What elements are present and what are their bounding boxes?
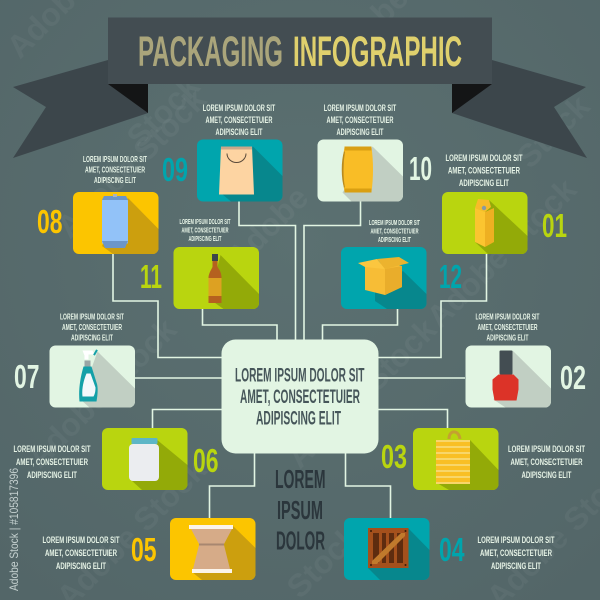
icon: jar <box>129 438 159 481</box>
caption 11 <box>180 219 231 243</box>
icon: nail polish <box>492 350 518 400</box>
caption 01: LOREM IPSUM DOLOR SIT <box>446 153 523 164</box>
caption 04 <box>478 535 555 572</box>
icon: bottle <box>208 254 222 303</box>
watermark: Adobe Stock <box>279 311 443 475</box>
card 08: can <box>73 192 158 254</box>
icon: paper bag <box>436 432 470 484</box>
caption 12 <box>369 220 420 244</box>
caption 05: LOREM IPSUM DOLOR SIT <box>42 535 120 546</box>
caption 06: ADIPISCING ELIT <box>27 470 77 481</box>
caption 10: LOREM IPSUM DOLOR SIT <box>324 103 396 114</box>
card 07: spray bottle <box>50 346 135 408</box>
caption 10 <box>324 103 396 138</box>
caption 02: ADIPISCING ELIT <box>486 332 529 342</box>
caption 04: ADIPISCING ELIT <box>491 561 541 572</box>
card 11: bottle <box>174 247 259 309</box>
watermark: Adobe Stock <box>19 311 183 475</box>
number 08: 08 <box>37 203 62 240</box>
number 11: 11 <box>140 258 162 295</box>
lorem ipsum dolor text <box>275 464 326 556</box>
number 02: 02 <box>560 359 586 396</box>
watermark: Adobe <box>219 179 315 275</box>
icon: pouch <box>342 146 373 192</box>
caption 09 <box>203 103 275 138</box>
caption 06: AMET, CONSECTETUIER <box>16 457 88 468</box>
ribbon band <box>108 18 492 84</box>
connector lines <box>113 201 486 518</box>
title: INFOGRAPHIC <box>293 28 462 76</box>
icon: spray bottle <box>79 349 98 402</box>
caption 01: AMET, CONSECTETUIER <box>448 166 520 176</box>
number 09: 09 <box>162 151 188 188</box>
watermark: Adobe Stock <box>49 81 213 245</box>
card 05: pizza box <box>170 518 256 580</box>
caption 08: LOREM IPSUM DOLOR SIT <box>83 154 147 164</box>
caption 09: AMET, CONSECTETUIER <box>206 115 273 126</box>
central panel <box>222 340 378 454</box>
icon: box <box>358 257 409 295</box>
caption 08: AMET, CONSECTETUIER <box>85 164 145 174</box>
caption 06: LOREM IPSUM DOLOR SIT <box>14 444 91 455</box>
number 10: 10 <box>409 150 432 187</box>
number 06: 06 <box>193 442 218 479</box>
number 12: 12 <box>439 258 462 295</box>
ribbon right tail <box>452 60 587 158</box>
central panel text: ADIPISCING ELIT <box>256 408 341 430</box>
caption 02: LOREM IPSUM DOLOR SIT <box>476 312 540 322</box>
number 04: 04 <box>439 531 465 568</box>
lorem ipsum dolor text: LOREM <box>275 464 326 494</box>
caption 02: AMET, CONSECTETUIER <box>478 322 538 332</box>
caption 01 <box>446 153 523 189</box>
caption 12: LOREM IPSUM DOLOR SIT <box>369 220 420 227</box>
icon: pizza box <box>189 525 233 573</box>
number 05: 05 <box>131 531 156 568</box>
caption 05 <box>42 535 120 572</box>
caption 04: LOREM IPSUM DOLOR SIT <box>478 535 555 546</box>
card 06: jar <box>102 428 188 490</box>
number 07: 07 <box>14 358 40 395</box>
caption 10: ADIPISCING ELIT <box>336 127 384 138</box>
caption 03 <box>508 444 585 481</box>
central panel text <box>235 366 365 430</box>
caption 04: AMET, CONSECTETUIER <box>480 548 552 559</box>
card 01: carton <box>442 192 528 254</box>
ribbon left fold <box>108 84 148 113</box>
caption 07: AMET, CONSECTETUIER <box>62 322 122 332</box>
card 03: paper bag <box>413 428 498 490</box>
caption 01: ADIPISCING ELIT <box>459 178 509 189</box>
central panel text: AMET, CONSECTETUIER <box>240 387 360 408</box>
icon: carton <box>475 199 494 247</box>
caption 08: ADIPISCING ELIT <box>94 175 136 185</box>
caption 11: LOREM IPSUM DOLOR SIT <box>180 219 231 226</box>
card 09: shopping bag <box>197 140 282 202</box>
ribbon right fold <box>452 84 492 113</box>
caption 03: ADIPISCING ELIT <box>522 470 572 481</box>
central panel text: LOREM IPSUM DOLOR SIT <box>235 366 365 386</box>
caption 09: ADIPISCING ELIT <box>216 127 263 138</box>
lorem ipsum dolor text: DOLOR <box>276 526 325 556</box>
watermark: Stock <box>119 68 207 155</box>
stock id text: Adobe Stock | #105817396 <box>7 468 21 591</box>
caption 12: AMET, CONSECTETUIER <box>370 228 418 236</box>
icon: can <box>102 194 128 248</box>
card 04: wooden crate <box>344 518 430 580</box>
caption 05: AMET, CONSECTETUIER <box>45 548 117 559</box>
caption 08 <box>83 154 147 185</box>
card 02: nail polish <box>466 346 551 408</box>
ribbon banner <box>13 18 587 158</box>
number 01: 01 <box>542 207 567 244</box>
caption 11: ADIPISCING ELIT <box>188 236 222 243</box>
number 03: 03 <box>381 438 407 475</box>
caption 05: ADIPISCING ELIT <box>56 561 106 572</box>
caption 02 <box>476 312 540 342</box>
caption 11: AMET, CONSECTETUIER <box>182 228 228 234</box>
caption 07 <box>60 312 124 342</box>
caption 06 <box>14 444 91 481</box>
caption 12: ADIPISCING ELIT <box>378 237 411 244</box>
caption 10: AMET, CONSECTETUIER <box>326 115 394 126</box>
card 12: box <box>341 247 426 309</box>
caption 07: LOREM IPSUM DOLOR SIT <box>60 312 124 322</box>
caption 09: LOREM IPSUM DOLOR SIT <box>203 103 275 114</box>
lorem ipsum dolor text: IPSUM <box>277 495 323 525</box>
caption 07: ADIPISCING ELIT <box>71 332 113 342</box>
watermark: Adobe Stock <box>419 171 583 335</box>
card 10: pouch <box>318 140 403 202</box>
ribbon left tail <box>13 60 148 158</box>
watermark: Stock <box>509 88 597 175</box>
icon: bag <box>219 146 254 194</box>
title: PACKAGING <box>138 28 283 76</box>
icon: crate <box>368 528 408 568</box>
